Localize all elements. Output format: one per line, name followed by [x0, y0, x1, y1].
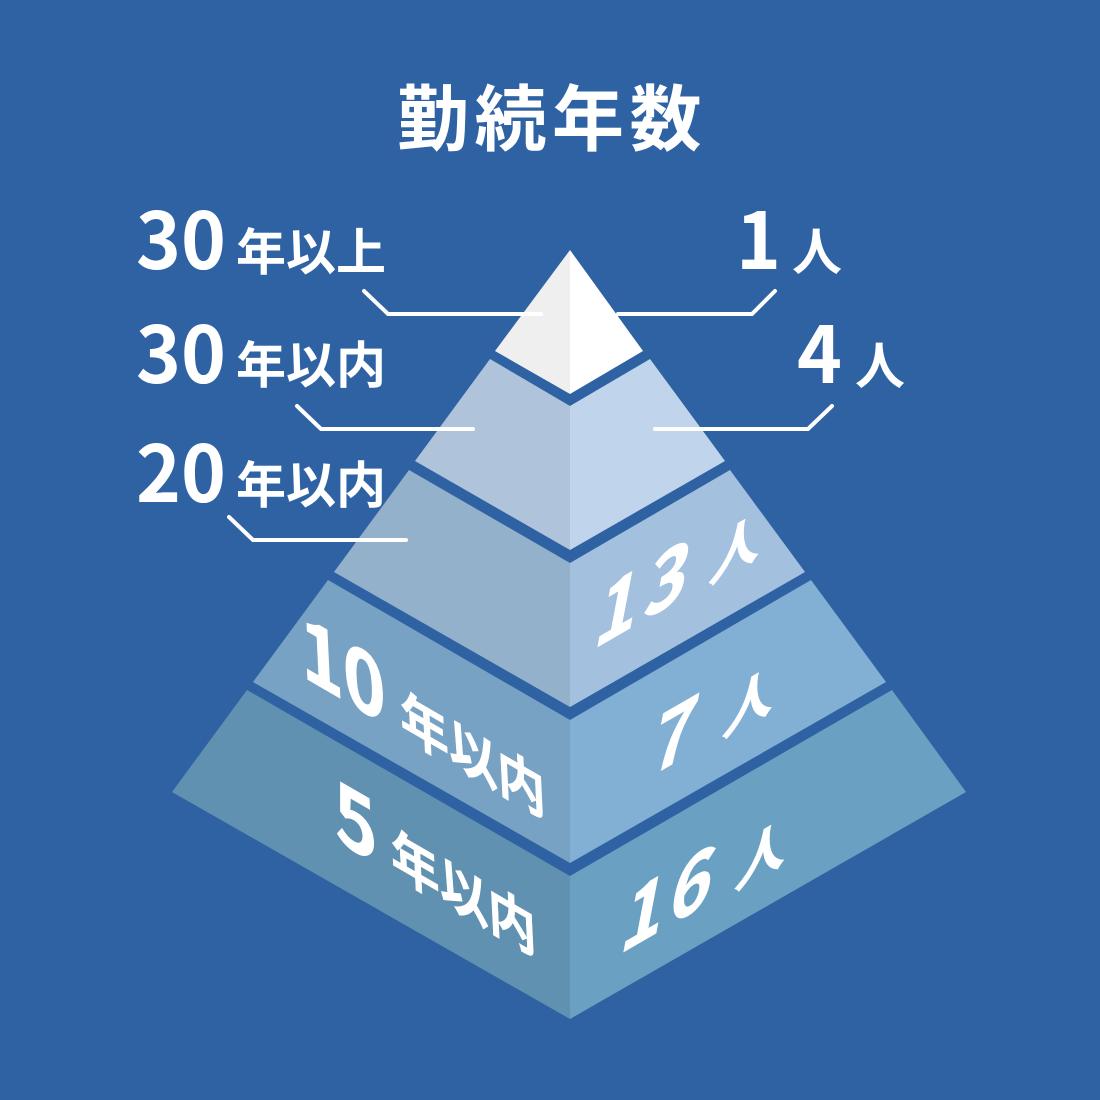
label: within 5 years: 年以内	[389, 807, 538, 972]
title: 勤続年数	[397, 61, 707, 166]
count: 16 people	[613, 762, 803, 980]
label: within 10 years: 年以内	[398, 669, 548, 835]
label: within 10 years	[297, 580, 548, 843]
count: 4 people: 4	[797, 294, 842, 406]
leader line: within 30 years	[297, 406, 473, 429]
tier: within 5 years	[172, 690, 966, 1019]
label: within 20 years	[136, 413, 386, 525]
leader line: within 20 years	[229, 517, 406, 540]
count: 1 person: 人	[792, 213, 842, 285]
label: within 20 years: 年以内	[236, 446, 386, 518]
label: 30 years and over: 年以上	[236, 213, 386, 285]
count: 16 people: 16	[613, 803, 732, 980]
leader line: 30 years and over	[364, 291, 541, 314]
count: 1 person	[736, 180, 842, 292]
count: 13 people	[587, 457, 777, 675]
label: within 5 years	[331, 744, 539, 982]
count: 7 people: 人	[718, 642, 784, 755]
tier: within 30 years	[415, 359, 725, 550]
label: within 20 years: 20	[136, 413, 226, 525]
pyramid	[172, 250, 966, 1019]
count: 1 person: 1	[736, 180, 781, 292]
label: 30 years and over: 30	[136, 180, 226, 292]
count: 7 people	[643, 610, 791, 803]
count: 16 people: 人	[730, 794, 797, 908]
count: 4 people	[797, 294, 905, 406]
count: 7 people: 7	[643, 657, 709, 803]
leader line: 1 person	[618, 291, 775, 314]
count: 4 people: 人	[855, 327, 905, 399]
label: within 30 years	[136, 294, 386, 406]
leader line: 4 people	[655, 406, 832, 429]
label: 30 years and over	[136, 180, 386, 292]
label: within 30 years: 30	[136, 294, 226, 406]
tier: within 20 years	[334, 470, 805, 707]
tier: within 10 years	[253, 580, 886, 863]
label: within 30 years: 年以内	[236, 326, 386, 398]
label: within 5 years: 5	[331, 744, 380, 890]
count: 13 people: 人	[704, 488, 771, 602]
tier: 30 years and over	[495, 250, 643, 394]
label: within 10 years: 10	[297, 580, 388, 750]
count: 13 people: 13	[587, 496, 710, 675]
